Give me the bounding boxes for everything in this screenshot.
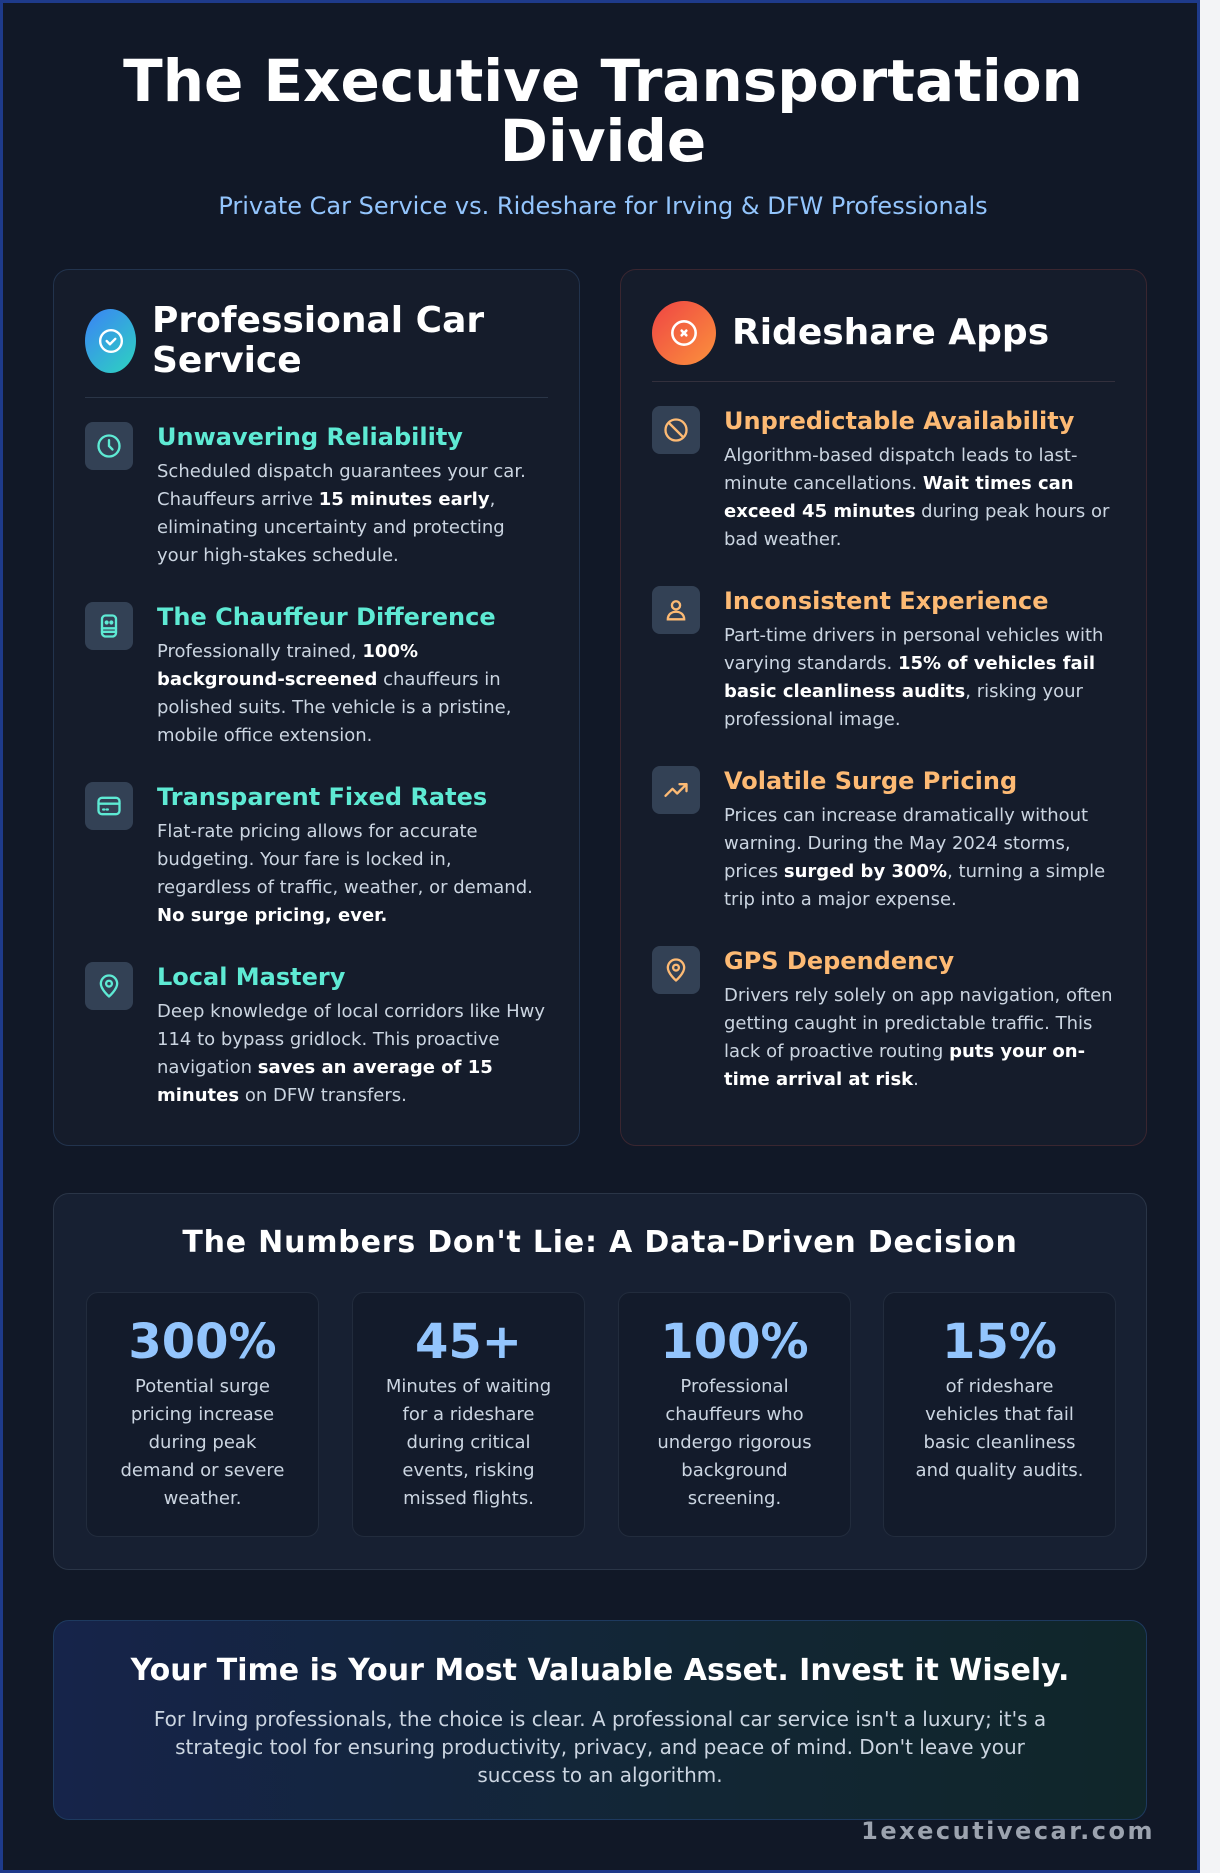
item: local mastery [85,962,545,1106]
item: fixed rates: Transparent Fixed Rates [157,783,487,811]
item: local mastery: Deep knowledge of local corridors like Hwy 114 to bypass gridlock. This proactive navigation saves an average of 15 minutes on DFW transfers. [157,1001,545,1106]
stat: 300%: 300% [128,1314,277,1370]
icon: clock [85,422,133,470]
icon: x circle [652,301,716,365]
stat: 45+ [352,1292,585,1537]
callout: conclusion [53,1620,1147,1820]
panel header: Professional Car [152,300,484,341]
item: experience: Part-time drivers in personal vehicles with varying standards. 15% of vehicles fail basic cleanliness audits, risking your professional image. [724,625,1103,730]
panel header: Rideshare Apps [732,312,1049,353]
item: local mastery: Local Mastery [157,963,345,991]
icon: check circle [85,309,136,373]
title: The Executive Transportation [123,47,1083,115]
subtitle: Private Car Service vs. Rideshare for Irving & DFW Professionals [218,192,988,220]
item: chauffeur: Professionally trained, 100% background-screened chauffeurs in polished suits. The vehicle is a pristine, mobile office extension. [157,641,511,746]
item: experience [652,586,1103,730]
panel: professional car service [53,269,580,1146]
item: availability: Unpredictable Availability [724,407,1074,435]
panel: statistics [53,1193,1147,1570]
stat: 15%: 15% [942,1314,1057,1370]
icon: trend up [652,766,700,814]
stat: 100%: 100% [660,1314,809,1370]
item: chauffeur [85,602,511,746]
item: availability: Algorithm-based dispatch leads to last-minute cancellations. Wait times can exceed 45 minutes during peak hours or bad weather. [724,445,1109,550]
stat: 15%: of rideshare vehicles that fail basic cleanliness and quality audits. [916,1376,1083,1481]
footer brand: 1executivecar.com [861,1817,1155,1845]
stat: 45+: Minutes of waiting for a rideshare during critical events, risking missed flights. [386,1376,551,1509]
panel header [85,301,548,398]
item: gps: Drivers rely solely on app navigation, often getting caught in predictable traffic. This lack of proactive routing puts your on-time arrival at risk. [724,985,1113,1090]
icon: map pin [652,946,700,994]
callout: conclusion: Your Time is Your Most Valuable Asset. Invest it Wisely. [131,1653,1069,1688]
item: fixed rates: Flat-rate pricing allows for accurate budgeting. Your fare is locked in, regardless of traffic, weather, or demand. No surge pricing, ever. [157,821,533,926]
item: surge pricing: Volatile Surge Pricing [724,767,1017,795]
stat: 300% [86,1292,319,1537]
title: Divide [500,107,706,175]
icon: person [652,586,700,634]
icon: chauffeur [85,602,133,650]
item: fixed rates [85,782,533,926]
item: experience: Inconsistent Experience [724,587,1049,615]
item: chauffeur: The Chauffeur Difference [157,603,496,631]
stat: 100% [618,1292,851,1537]
stat: 45+: 45+ [415,1314,522,1370]
stats heading: The Numbers Don't Lie: A Data-Driven Decision [182,1225,1018,1260]
panel header: Service [152,340,302,381]
icon: map pin [85,962,133,1010]
stat: 15% [883,1292,1116,1537]
item: reliability [85,422,526,566]
icon: card [85,782,133,830]
item: reliability: Scheduled dispatch guarantees your car. Chauffeurs arrive 15 minutes early, eliminating uncertainty and protecting your high-stakes schedule. [157,461,526,566]
item: gps [652,946,1113,1090]
panel header [652,301,1115,382]
callout: conclusion: For Irving professionals, the choice is clear. A professional car service isn't a luxury; it's a strategic tool for ensuring productivity, privacy, and peace of mind. Don't leave your success to an algorithm. [154,1707,1046,1787]
stat: 100%: Professional chauffeurs who undergo rigorous background screening. [657,1376,812,1509]
item: gps: GPS Dependency [724,947,954,975]
item: surge pricing [652,766,1105,910]
title [123,47,1083,175]
icon: ban [652,406,700,454]
item: reliability: Unwavering Reliability [157,423,463,451]
panel: rideshare apps [620,269,1147,1146]
item: surge pricing: Prices can increase dramatically without warning. During the May 2024 storms, prices surged by 300%, turning a simple trip into a major expense. [724,805,1105,910]
item: availability [652,406,1110,550]
stat: 300%: Potential surge pricing increase during peak demand or severe weather. [120,1376,284,1509]
